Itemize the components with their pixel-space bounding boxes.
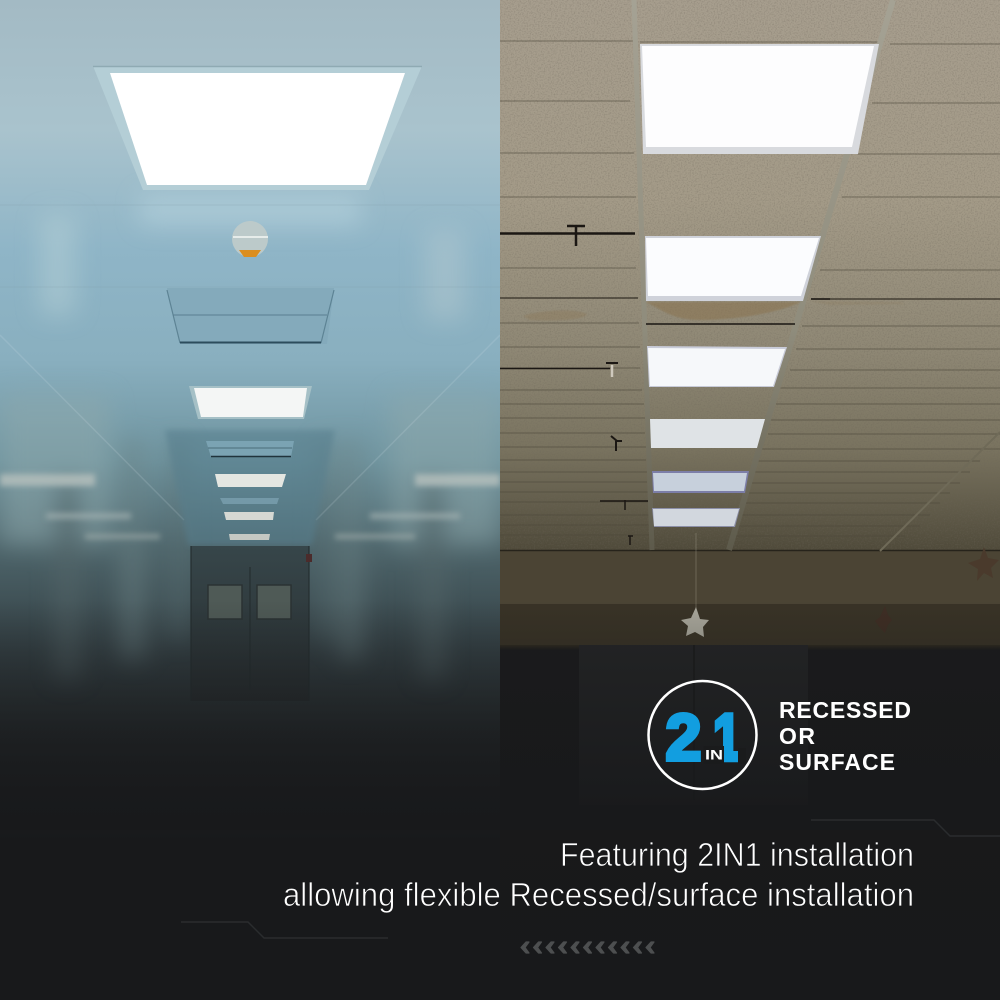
caption text: Featuring 2IN1 installation bbox=[560, 836, 914, 873]
chevron row arrow bbox=[521, 942, 654, 953]
dark tile gaps and sprinklers bbox=[500, 226, 830, 545]
ceiling panel light 6 bbox=[652, 508, 740, 527]
badge label: recessed or surface bbox=[779, 697, 911, 775]
corridor end door bbox=[190, 546, 312, 678]
ceiling vent 1 bbox=[167, 288, 334, 344]
caption text bbox=[283, 836, 914, 913]
badge: 2 in 1 icon: IN bbox=[705, 746, 723, 762]
ceiling tile lines bbox=[500, 41, 1000, 550]
badge: 2 in 1 icon: 1 bbox=[713, 700, 741, 774]
ceiling panel light 4 bbox=[650, 419, 765, 448]
hanging star decorations bbox=[681, 533, 999, 637]
ceiling panel light 5 bbox=[652, 471, 749, 493]
wall light reflections bbox=[0, 474, 500, 539]
badge: 2 in 1 icon bbox=[648, 681, 756, 789]
ceiling grid rails bbox=[634, 0, 1000, 551]
ceiling panel light 3 bbox=[647, 346, 787, 387]
lower wall cabinets bbox=[579, 645, 808, 658]
ceiling panel light 3 bbox=[215, 474, 286, 487]
panel: corridor photo with blue-lit ceiling panels bbox=[0, 0, 500, 732]
ceiling panel light 1 bbox=[93, 66, 422, 190]
ceiling panel light 2 bbox=[189, 386, 312, 419]
badge label: recessed or surface: OR bbox=[779, 723, 815, 749]
ceiling vent 2 bbox=[206, 441, 294, 457]
ceiling panel light 1 bbox=[640, 44, 879, 154]
smoke sensor bbox=[232, 221, 268, 257]
badge label: recessed or surface: RECESSED bbox=[779, 697, 911, 723]
wall band under ceiling bbox=[500, 590, 1000, 645]
bottom dark gradient overlay bbox=[0, 600, 1000, 830]
water stains bbox=[525, 302, 856, 320]
ceiling panel light 2 bbox=[645, 236, 821, 301]
distant ceiling channel bbox=[165, 430, 335, 545]
circuit line bottom left bbox=[181, 922, 388, 938]
ceiling panel light 4 bbox=[224, 512, 274, 520]
caption text: allowing flexible Recessed/surface installation bbox=[283, 876, 914, 913]
badge label: recessed or surface: SURFACE bbox=[779, 749, 895, 775]
ceiling panel light 5 bbox=[229, 534, 270, 540]
circuit line top right bbox=[811, 820, 1000, 836]
panel: office ceiling photo with tiled ceiling bbox=[500, 0, 1000, 676]
wall edge lines bbox=[0, 205, 500, 520]
ceiling vent 3 bbox=[220, 498, 279, 504]
badge: 2 in 1 icon: 2 bbox=[666, 700, 702, 774]
